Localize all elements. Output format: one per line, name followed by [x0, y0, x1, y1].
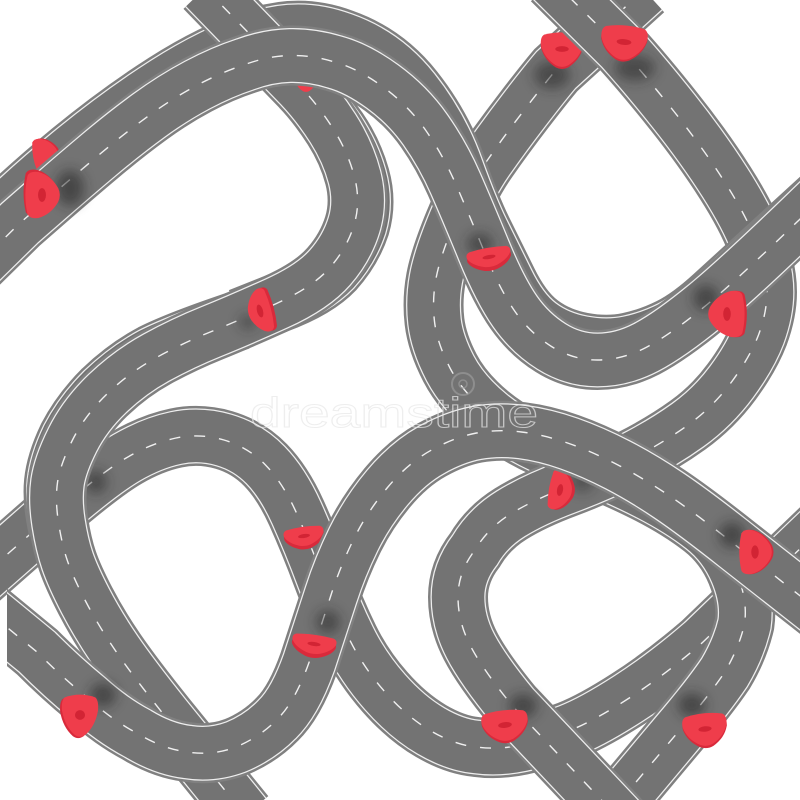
red sign below central crossing [546, 468, 594, 512]
red sign partly hidden at upper left [30, 136, 63, 174]
red sign on front road centre [290, 610, 340, 661]
road: upper parallel road beneath main road [0, 31, 800, 345]
road: main arching road from left to right [0, 55, 800, 360]
watermark: dreamstime [250, 389, 538, 436]
red sign on S-curve road [239, 286, 279, 336]
road: looping road from left edge to right edge [0, 436, 800, 748]
road: from top right sweeping to lower centre [458, 0, 767, 800]
watermark [250, 373, 538, 436]
red sign on main road left [24, 169, 84, 218]
red sign on lower-left loop road [283, 524, 326, 552]
road: lower front road from left stub to right edge [0, 431, 800, 753]
red sign bottom right [678, 693, 729, 750]
red sign on main road right [693, 285, 747, 337]
red sign on front road lower left [60, 683, 116, 738]
red sign on front road right [719, 522, 774, 574]
road: S-curve from top to bottom left [54, 0, 363, 800]
red sign bottom centre [480, 694, 537, 746]
shadow where S-curve road crosses loop road [85, 470, 107, 494]
red sign flat at centre [466, 233, 513, 275]
red sign on top right diagonal road [534, 32, 583, 89]
red sign top right [599, 23, 655, 81]
road: from top right down around to bottom [434, 0, 745, 800]
red sign hidden under main road [296, 77, 316, 92]
